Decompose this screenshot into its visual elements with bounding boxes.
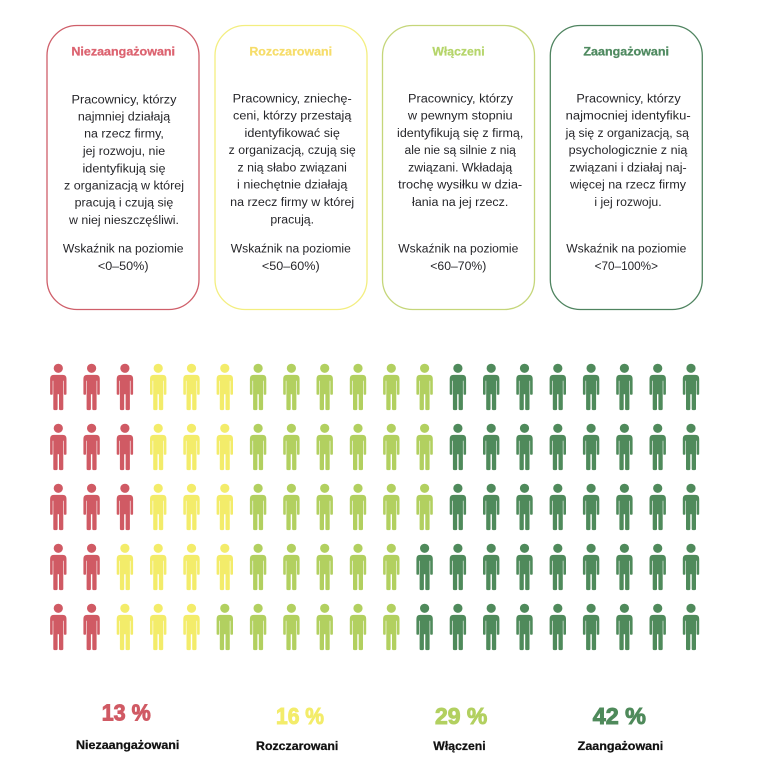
description: związani i działaj naj- — [569, 162, 687, 174]
panel: Niezaangażowani — [47, 26, 199, 310]
description: Pracownicy, którzy — [576, 93, 681, 105]
percentage: 42 % — [593, 703, 646, 729]
indicator range: Wskaźnik na poziomie — [63, 244, 184, 256]
card title: Włączeni — [432, 47, 485, 59]
description: ale nie są silnie z nią — [405, 145, 516, 157]
description: identyfikować się — [245, 128, 340, 140]
indicator range: <50–60%) — [262, 261, 320, 273]
description: związani. Wkładają — [408, 162, 513, 174]
description: pracują i czują się — [75, 198, 173, 210]
indicator range: Wskaźnik na poziomie — [398, 244, 518, 256]
percentage: 13 % — [102, 700, 151, 726]
pictogram chart: 100 people — [50, 364, 699, 650]
pictogram row 5 — [50, 604, 699, 650]
card title: Zaangażowani — [583, 47, 669, 59]
description: więcej na rzecz firmy — [569, 180, 686, 192]
description — [229, 93, 356, 226]
description: identyfikują się z firmą, — [397, 128, 523, 140]
indicator range — [63, 244, 184, 273]
label: Zaangażowani — [578, 741, 663, 753]
description — [397, 93, 523, 209]
panel: Zaangażowani — [550, 26, 702, 310]
indicator range: <0–50%) — [98, 261, 149, 273]
description: z nią słabo związani — [238, 162, 347, 174]
indicator range: Wskaźnik na poziomie — [566, 244, 686, 256]
indicator range: <70–100%> — [595, 261, 658, 273]
stat: Włączeni 29% — [433, 703, 487, 753]
description: i niechętnie działają — [237, 180, 348, 192]
description: psychologicznie z nią — [569, 145, 688, 157]
description: ceni, którzy przestają — [233, 111, 352, 123]
description: ją się z organizacją, są — [565, 128, 690, 140]
card border — [215, 26, 367, 310]
indicator range — [566, 244, 686, 273]
pictogram row 3 — [50, 484, 699, 530]
label: Rozczarowani — [256, 741, 338, 753]
indicator range — [231, 244, 351, 273]
description: Pracownicy, zniechę- — [233, 93, 352, 105]
description: trochę wysiłku w dzia- — [398, 180, 522, 192]
description: jej rozwoju, nie — [82, 146, 165, 158]
pictogram row 2 — [50, 424, 699, 470]
description: łania na jej rzecz. — [412, 197, 508, 209]
description: w niej nieszczęśliwi. — [68, 215, 179, 227]
pictogram row 1 — [50, 364, 699, 410]
description — [565, 93, 691, 209]
card border — [47, 26, 199, 310]
description: najmocniej identyfiku- — [566, 111, 691, 123]
card title: Niezaangażowani — [71, 47, 175, 59]
description: pracują. — [270, 214, 314, 226]
panel: Włączeni — [382, 26, 534, 310]
description: identyfikują się — [82, 163, 166, 175]
indicator range: Wskaźnik na poziomie — [231, 244, 351, 256]
description: Pracownicy, którzy — [408, 93, 513, 105]
stat: Zaangażowani 42% — [578, 703, 663, 753]
description: z organizacją w której — [64, 180, 184, 192]
indicator range: <60–70%) — [430, 261, 486, 273]
indicator range — [398, 244, 518, 273]
percentage: 29 % — [435, 703, 487, 729]
card border — [550, 26, 702, 310]
card title: Rozczarowani — [249, 47, 332, 59]
stat: Rozczarowani 16% — [256, 703, 338, 753]
pictogram row 4 — [50, 544, 699, 590]
description: najmniej działają — [78, 112, 171, 124]
card border — [382, 26, 534, 310]
description: z organizacją, czują się — [229, 145, 356, 157]
percentage: 16 % — [276, 703, 324, 729]
panel: Rozczarowani — [215, 26, 367, 310]
description — [64, 94, 184, 227]
description: Pracownicy, którzy — [72, 94, 177, 106]
description: i jej rozwoju. — [594, 197, 662, 209]
stat: Niezaangażowani 13% — [76, 700, 179, 752]
description: w pewnym stopniu — [407, 111, 513, 123]
description: na rzecz firmy, — [84, 129, 164, 141]
description: na rzecz firmy w której — [230, 197, 354, 209]
label: Niezaangażowani — [76, 740, 179, 752]
label: Włączeni — [433, 741, 486, 753]
